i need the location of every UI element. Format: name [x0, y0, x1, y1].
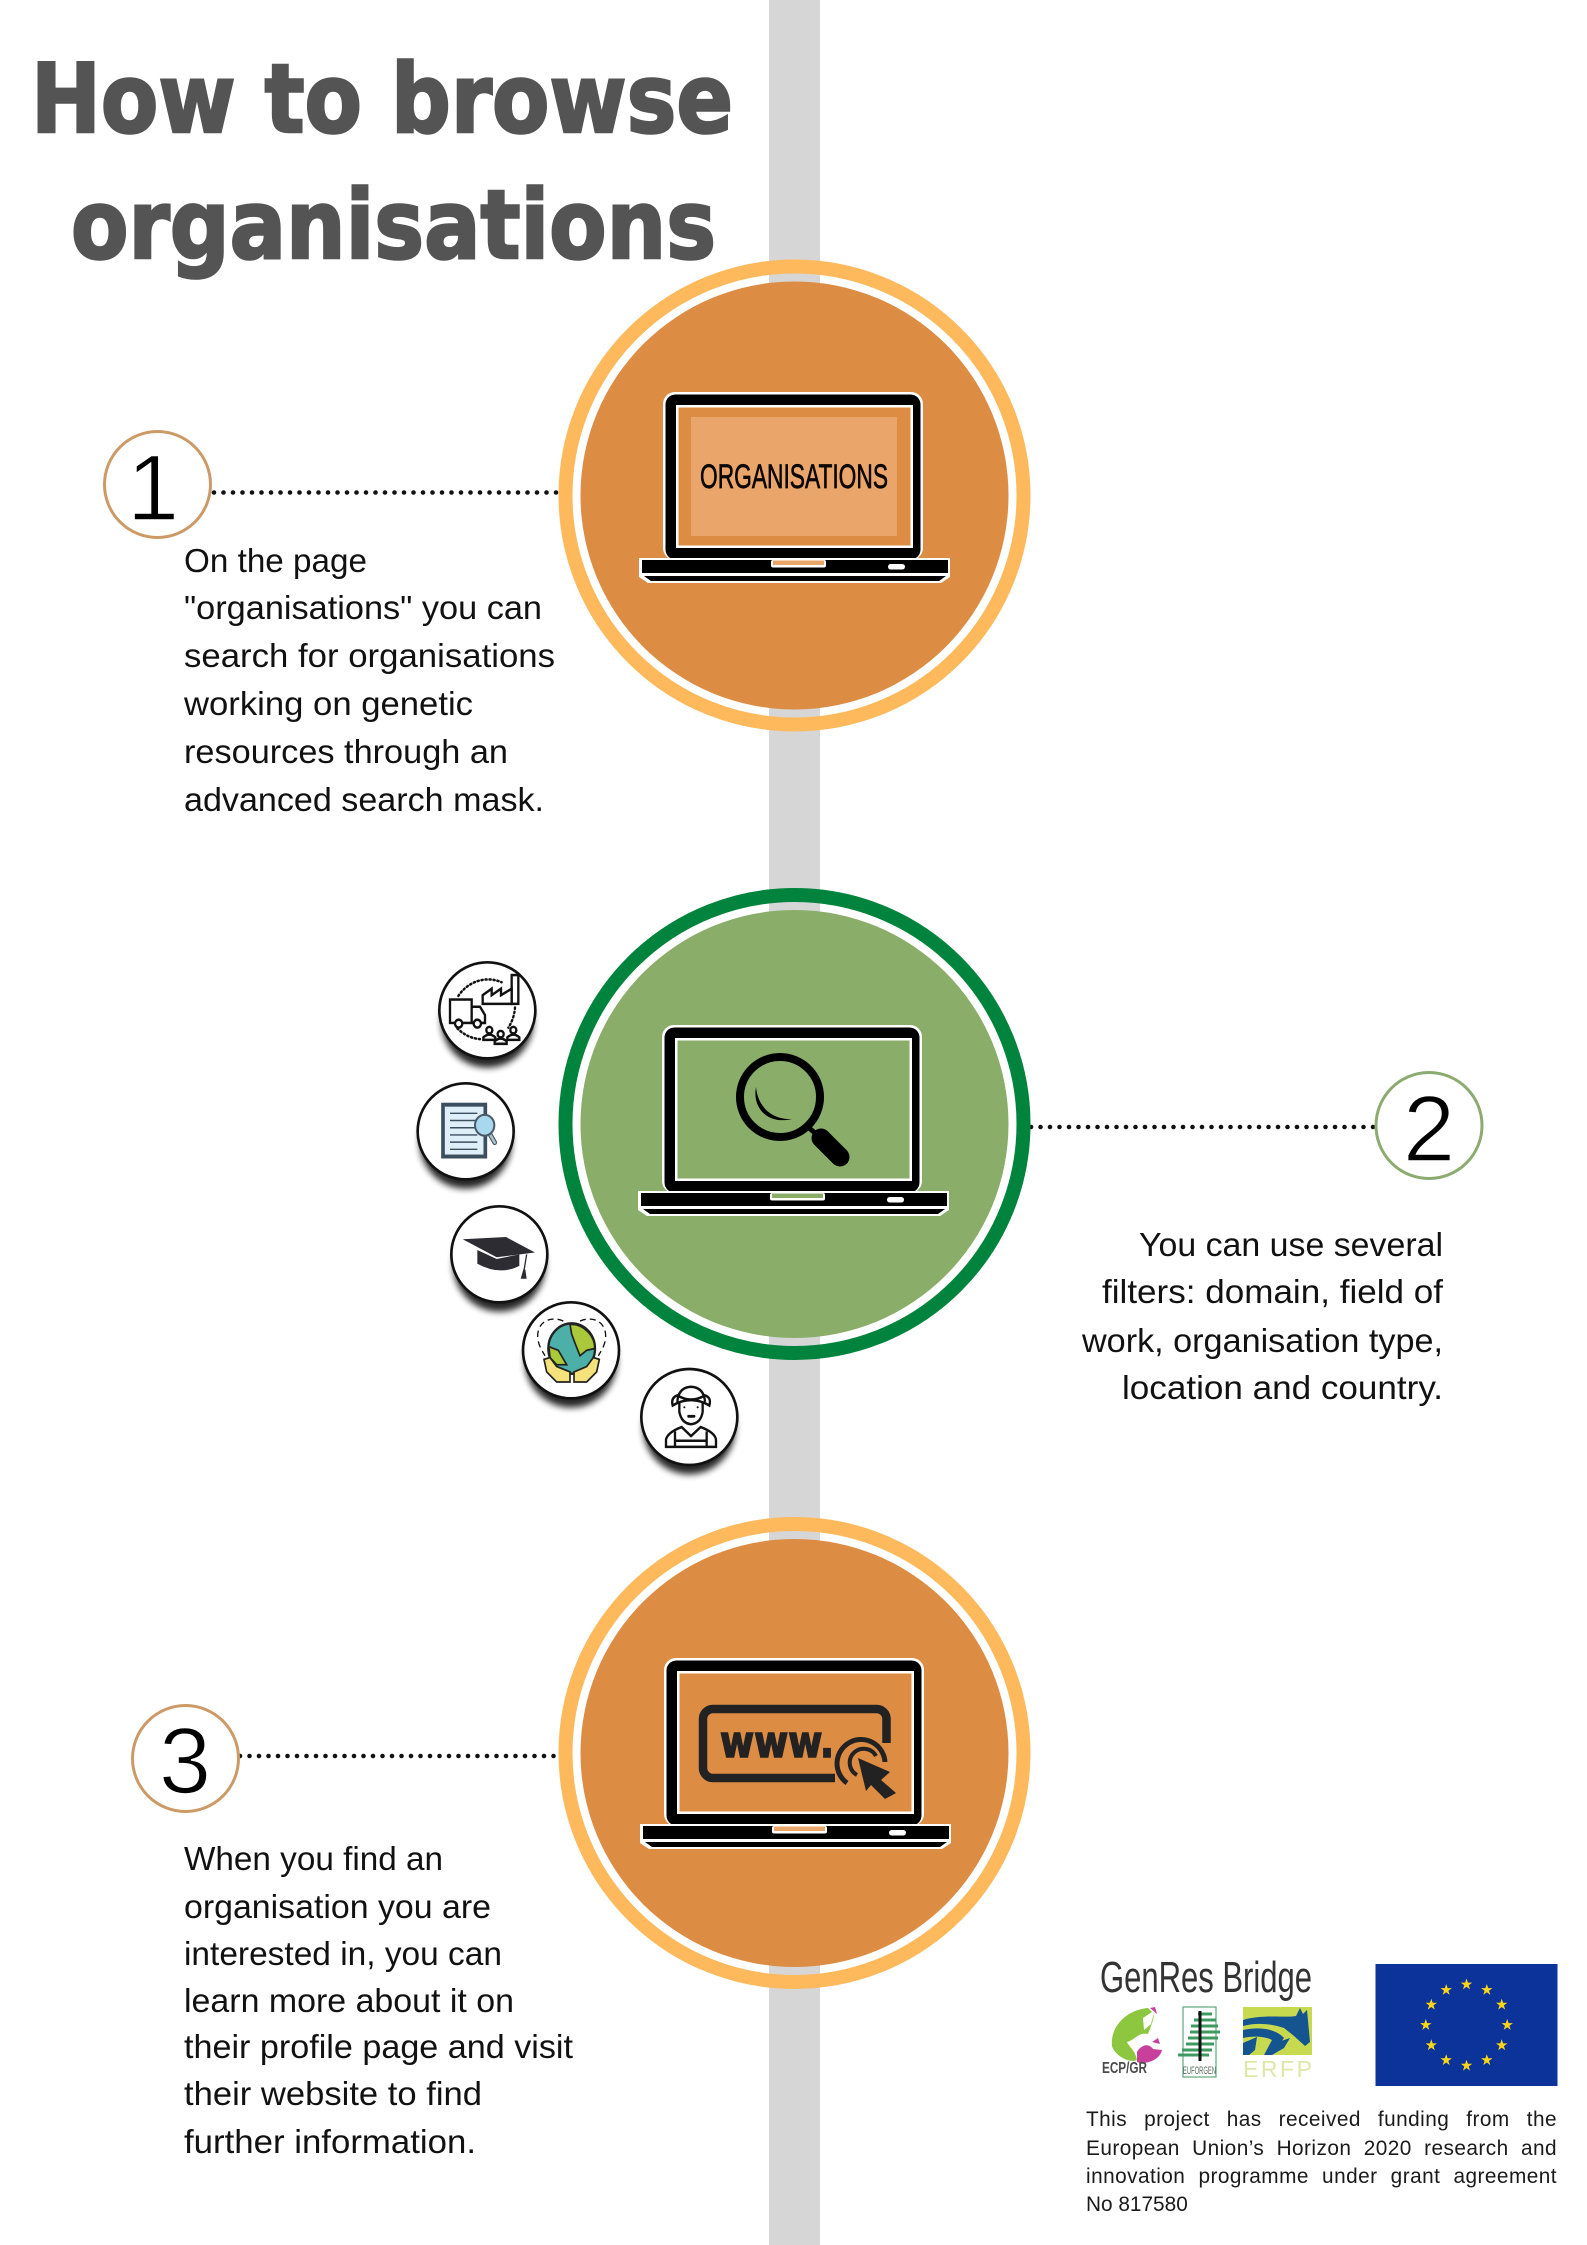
- number badge 1: [104, 432, 210, 540]
- number badge 3: 3: [159, 1708, 211, 1813]
- logo: EU flag: [1376, 1964, 1558, 2086]
- connector: step 3: [240, 1754, 556, 1758]
- funding statement: [1086, 2108, 1557, 2216]
- title: [31, 45, 733, 281]
- funding statement: No 817580: [1086, 2193, 1188, 2216]
- icon: document search: [418, 1083, 514, 1189]
- logo: ERFP: ERFP: [1243, 2056, 1312, 2082]
- title: How to browse: [31, 45, 733, 155]
- connector: step 1: [214, 490, 557, 495]
- text: step 2: filters: domain, field of: [1102, 1274, 1444, 1311]
- logo: ERFP: [1243, 2007, 1312, 2082]
- circle: step 1 organisations: [566, 266, 1024, 724]
- text: step 3: their profile page and visit: [184, 2029, 574, 2066]
- logo: GenRes Bridge: GenRes Bridge: [1100, 1953, 1312, 2002]
- icon: magnifying glass: [740, 1057, 840, 1157]
- icon: laptop with organisations screen: [639, 392, 950, 583]
- number badge 3: [132, 1706, 238, 1813]
- logo: ECP/GR: [1102, 2007, 1162, 2077]
- circle: step 3 website: [566, 1524, 1024, 1982]
- icon: farmer: [641, 1369, 737, 1474]
- funding statement: innovation programme under grant agreement: [1086, 2165, 1557, 2188]
- icon: www address bar with cursor: www.: [720, 1717, 834, 1768]
- icon: laptop with organisations screen: ORGANISATIONS: [700, 458, 888, 496]
- connector: step 2: [1031, 1125, 1375, 1129]
- text: step 1: working on genetic: [183, 686, 473, 723]
- logo: ECP/GR: ECP/GR: [1102, 2060, 1147, 2077]
- icon: graduation cap: [451, 1206, 547, 1312]
- text: step 2: location and country.: [1122, 1370, 1443, 1407]
- text: step 2: [1081, 1227, 1444, 1407]
- icon: laptop with website: [640, 1658, 951, 1849]
- icon: supply chain: [439, 962, 535, 1068]
- text: step 1: advanced search mask.: [184, 782, 544, 819]
- text: step 3: organisation you are: [184, 1889, 491, 1926]
- number badge 1: 1: [127, 435, 179, 540]
- text: step 1: [183, 543, 555, 819]
- icon: laptop with magnifying glass: [638, 1025, 949, 1216]
- text: step 3: further information.: [184, 2124, 476, 2161]
- text: step 1: resources through an: [184, 734, 508, 771]
- icon: globe in hands: [523, 1302, 619, 1408]
- title: organisations: [71, 171, 716, 281]
- text: step 3: When you find an: [184, 1841, 443, 1878]
- text: step 1: "organisations" you can: [184, 590, 542, 627]
- funding statement: This project has received funding from the: [1086, 2108, 1557, 2131]
- number badge 2: [1376, 1072, 1482, 1181]
- text: step 1: search for organisations: [184, 638, 555, 675]
- icon: www address bar with cursor: [703, 1709, 896, 1799]
- logo: EUFORGEN: EUFORGEN: [1183, 2065, 1216, 2077]
- text: step 1: On the page: [184, 543, 367, 580]
- text: step 2: You can use several: [1139, 1227, 1443, 1264]
- circle: step 2 search: [566, 895, 1024, 1353]
- logo: EUFORGEN: [1178, 2007, 1220, 2077]
- text: step 3: learn more about it on: [184, 1983, 514, 2020]
- number badge 2: 2: [1403, 1076, 1455, 1181]
- text: step 3: [184, 1841, 574, 2161]
- logo: GenRes Bridge: [1100, 1953, 1312, 2082]
- text: step 3: their website to find: [184, 2076, 482, 2113]
- text: step 2: work, organisation type,: [1081, 1323, 1443, 1360]
- text: step 3: interested in, you can: [184, 1936, 502, 1973]
- small icons group: [418, 962, 737, 1474]
- funding statement: European Union’s Horizon 2020 research and: [1086, 2137, 1557, 2160]
